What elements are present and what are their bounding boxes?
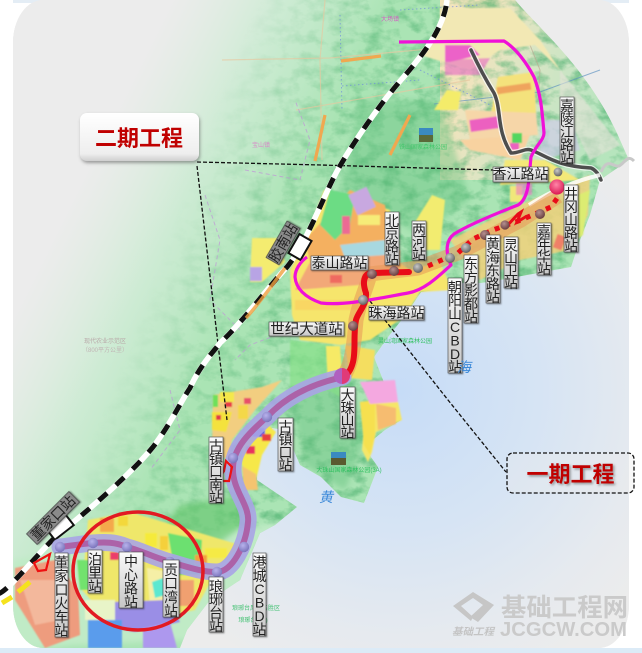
label: 灵山卫站: 灵 xyxy=(504,238,518,254)
railway line xyxy=(0,0,447,594)
label: 朝阳山CBD站: B xyxy=(450,332,460,348)
label: 北京路站: 站 xyxy=(385,251,399,267)
label: 董家口火车站: 家 xyxy=(54,568,68,584)
label: 中心路站: 中 xyxy=(124,554,138,570)
label: 北京路站: 京 xyxy=(385,226,399,242)
label: 琅琊台站: 台 xyxy=(209,605,223,621)
label: 东方影都站: 站 xyxy=(464,309,478,325)
label: 琅琊台站 xyxy=(209,577,223,634)
label: 古镇口南站: 口 xyxy=(209,464,223,480)
label: 井冈山路站: 山 xyxy=(564,212,578,228)
label: 董家口火车站: 火 xyxy=(54,595,68,611)
callout: phase two xyxy=(80,113,199,161)
label: 东方影都站: 方 xyxy=(464,269,478,285)
line 2 grey route xyxy=(471,50,601,180)
label: 珠海路站: 珠海路站 xyxy=(368,305,424,321)
label: 贡口湾站: 贡 xyxy=(164,562,178,578)
watermark: small script: 基础工程 xyxy=(452,626,496,638)
watermark: URL: JCGCW.COM xyxy=(500,619,627,641)
sea name: 黄: 黄 xyxy=(319,489,335,505)
place name text: 琅琊台(3A) xyxy=(238,616,268,624)
station: Dongjiakou rail station xyxy=(46,514,74,540)
label: 嘉陵江路站: 站 xyxy=(560,150,574,166)
label: 琅琊台站: 站 xyxy=(209,618,223,634)
label: 黄海东路站 xyxy=(486,235,500,305)
label: 东方影都站: 影 xyxy=(464,283,478,299)
label: 古镇口南站: 古 xyxy=(209,438,223,454)
label: 古镇口南站: 南 xyxy=(209,477,223,493)
label: 古镇口站: 古 xyxy=(278,419,292,435)
label: 嘉陵江路站: 嘉 xyxy=(560,98,574,114)
label: 贡口湾站: 站 xyxy=(164,603,178,619)
label: 大珠山站: 山 xyxy=(340,412,354,428)
label: 世纪大道站: 世纪大道站 xyxy=(270,321,343,338)
label: 泊里站: 站 xyxy=(88,578,102,594)
dashed leader lines: phase two xyxy=(197,162,493,420)
label: 灵山卫站: 卫 xyxy=(504,262,518,278)
label: 大珠山站 xyxy=(340,387,355,441)
label: 嘉年华站 xyxy=(537,223,551,277)
label: 朝阳山CBD站: D xyxy=(450,346,460,362)
label: 井冈山路站: 路 xyxy=(564,225,578,241)
label: 贡口湾站: 口 xyxy=(164,576,178,592)
label: 嘉年华站: 站 xyxy=(537,261,551,277)
label: 董家口站 rotated: 董家口站 xyxy=(28,493,78,543)
label: 泊里站 xyxy=(88,550,102,594)
label: 两河站: 站 xyxy=(412,246,426,262)
label: 朝阳山CBD站: 阳 xyxy=(448,293,462,309)
place name text: 大场镇 xyxy=(381,15,399,23)
magenta line: phase two xyxy=(295,41,544,304)
place name text: 宝山镇 xyxy=(252,141,270,149)
label: 东方影都站: 东 xyxy=(464,256,478,272)
district: north xyxy=(420,8,620,185)
label: 董家口火车站: 站 xyxy=(54,623,68,639)
label: 东方影都站: 都 xyxy=(464,296,478,312)
sea and grey backdrop xyxy=(180,0,629,648)
yellow rail spur xyxy=(2,582,30,603)
label: 琅琊台站: 琅 xyxy=(209,578,223,594)
label: 中心路站: 路 xyxy=(124,580,138,596)
red circle highlight xyxy=(73,512,203,630)
district: Guzhenkou xyxy=(212,380,282,490)
label: 井冈山路站 xyxy=(564,185,578,254)
place name text: （800平方公里） xyxy=(82,346,128,354)
label: 黄海东路站: 路 xyxy=(486,276,500,292)
label: 港城CBD站: C xyxy=(254,581,265,597)
white expressway xyxy=(529,175,600,205)
label: 两河站: 河 xyxy=(412,234,426,250)
callout: phase one xyxy=(507,453,634,493)
label: 朝阳山CBD站: C xyxy=(450,319,460,335)
orange highway segments xyxy=(315,56,410,161)
label: 井冈山路站: 站 xyxy=(564,238,578,254)
red line: dotted section xyxy=(428,197,558,266)
label: 泰山路站: 泰山路站 xyxy=(312,255,368,271)
label: 朝阳山CBD站: 山 xyxy=(448,306,462,322)
label: 大珠山站: 珠 xyxy=(340,400,354,416)
callout: phase two: 二期工程 xyxy=(95,126,183,151)
label: 贡口湾站: 湾 xyxy=(164,589,178,605)
place name text: 灵山湾国家森林公园 xyxy=(378,337,432,345)
district: Taishan road xyxy=(250,187,452,400)
label: 嘉陵江路站: 江 xyxy=(560,124,574,140)
label: 嘉陵江路站: 陵 xyxy=(560,111,574,127)
label: 朝阳山CBD站 xyxy=(448,278,462,375)
label: 港城CBD站: D xyxy=(254,608,265,624)
label: 黄海东路站: 黄 xyxy=(486,236,500,252)
label: 港城CBD站: 站 xyxy=(252,621,266,637)
watermark xyxy=(452,592,628,641)
label: 港城CBD站: 城 xyxy=(252,568,266,584)
label: 董家口火车站 xyxy=(54,553,68,639)
label: 董家口火车站: 车 xyxy=(54,609,68,625)
label: 港城CBD站: 港 xyxy=(252,554,266,570)
watermark: site name: 基础工程网 xyxy=(501,594,628,622)
district: east coast xyxy=(450,175,590,280)
label: 胶南站 rotated: 胶南站 xyxy=(266,221,300,265)
wave mark xyxy=(601,158,634,172)
label: 北京路站: 路 xyxy=(385,238,399,254)
label: 大珠山站: 站 xyxy=(340,425,354,441)
label: 古镇口南站: 镇 xyxy=(209,451,223,467)
label: 朝阳山CBD站: 站 xyxy=(448,359,462,375)
label: 黄海东路站: 东 xyxy=(486,263,500,279)
callout: phase one: 一期工程 xyxy=(526,462,615,487)
place name text: 铁山国家森林公园 xyxy=(399,143,447,151)
label: 香江路站: 香江路站 xyxy=(492,166,548,182)
label: 中心路站 xyxy=(119,552,143,610)
label: 港城CBD站 xyxy=(252,553,266,637)
label: 嘉年华站: 嘉 xyxy=(537,224,551,240)
label: 中心路站: 心 xyxy=(124,567,138,583)
label: 古镇口站: 站 xyxy=(278,457,292,473)
orange highway along rail xyxy=(246,268,285,318)
label: 大珠山站: 大 xyxy=(340,387,354,403)
district: Boli and Dongjiakou xyxy=(15,512,240,648)
label: 古镇口南站: 站 xyxy=(209,490,223,506)
road and boundary details xyxy=(150,0,600,470)
label: 嘉陵江路站 xyxy=(560,97,574,166)
label: 董家口火车站: 口 xyxy=(54,582,68,598)
label: 灵山卫站: 山 xyxy=(504,250,518,266)
station markers xyxy=(55,168,565,577)
label: 朝阳山CBD站: 朝 xyxy=(448,279,462,295)
label: 黄海东路站: 站 xyxy=(486,289,500,305)
label: 灵山卫站 xyxy=(504,237,518,291)
label: 东方影都站 xyxy=(464,255,478,325)
place name text xyxy=(82,15,447,624)
icon: watermark logo xyxy=(453,592,494,622)
label: 古镇口站 xyxy=(278,418,293,473)
district: Dazhushan peninsula xyxy=(345,345,402,462)
station: Jiaonan rail station xyxy=(288,234,312,260)
label: 两河站: 两 xyxy=(412,222,426,238)
red outline markers xyxy=(34,461,232,571)
label: 中心路站: 站 xyxy=(124,594,138,610)
label: 贡口湾站 xyxy=(163,560,179,619)
label: 黄海东路站: 海 xyxy=(486,249,500,265)
purple line: phase one south xyxy=(60,377,343,572)
dashed leader line: phase one xyxy=(366,296,506,472)
label: 嘉年华站: 华 xyxy=(537,248,551,264)
label: 灵山卫站: 站 xyxy=(504,275,518,291)
label: 琅琊台站: 琊 xyxy=(209,592,223,608)
place name text: 现代农业示范区 xyxy=(84,337,126,345)
label: 井冈山路站: 冈 xyxy=(564,199,578,215)
place name text: 琅琊台风景名胜区 xyxy=(232,604,280,612)
label: 古镇口站: 口 xyxy=(278,444,292,460)
red scribble marker xyxy=(505,212,527,228)
label: 北京路站 xyxy=(385,212,399,267)
label: 井冈山路站: 井 xyxy=(564,186,578,202)
label: 两河站 xyxy=(412,221,426,262)
sea name: 海: 海 xyxy=(457,359,473,375)
label: 港城CBD站: B xyxy=(255,595,264,611)
label: 北京路站: 北 xyxy=(385,213,399,229)
label: 嘉陵江路站: 路 xyxy=(560,137,574,153)
label: 泊里站: 泊 xyxy=(88,552,102,568)
label: 董家口火车站: 董 xyxy=(54,555,68,571)
place name text: 大珠山国家森林公园(3A) xyxy=(316,466,382,474)
label: 嘉年华站: 年 xyxy=(537,236,551,252)
label: 古镇口南站 xyxy=(209,437,223,506)
label: 泊里站: 里 xyxy=(88,565,102,581)
icon: scenic photo north xyxy=(419,128,433,142)
red line: solid section xyxy=(343,272,409,377)
label: 古镇口站: 镇 xyxy=(278,432,292,448)
icon: scenic photo south xyxy=(331,452,346,465)
orange corridor of phase one xyxy=(343,196,558,377)
